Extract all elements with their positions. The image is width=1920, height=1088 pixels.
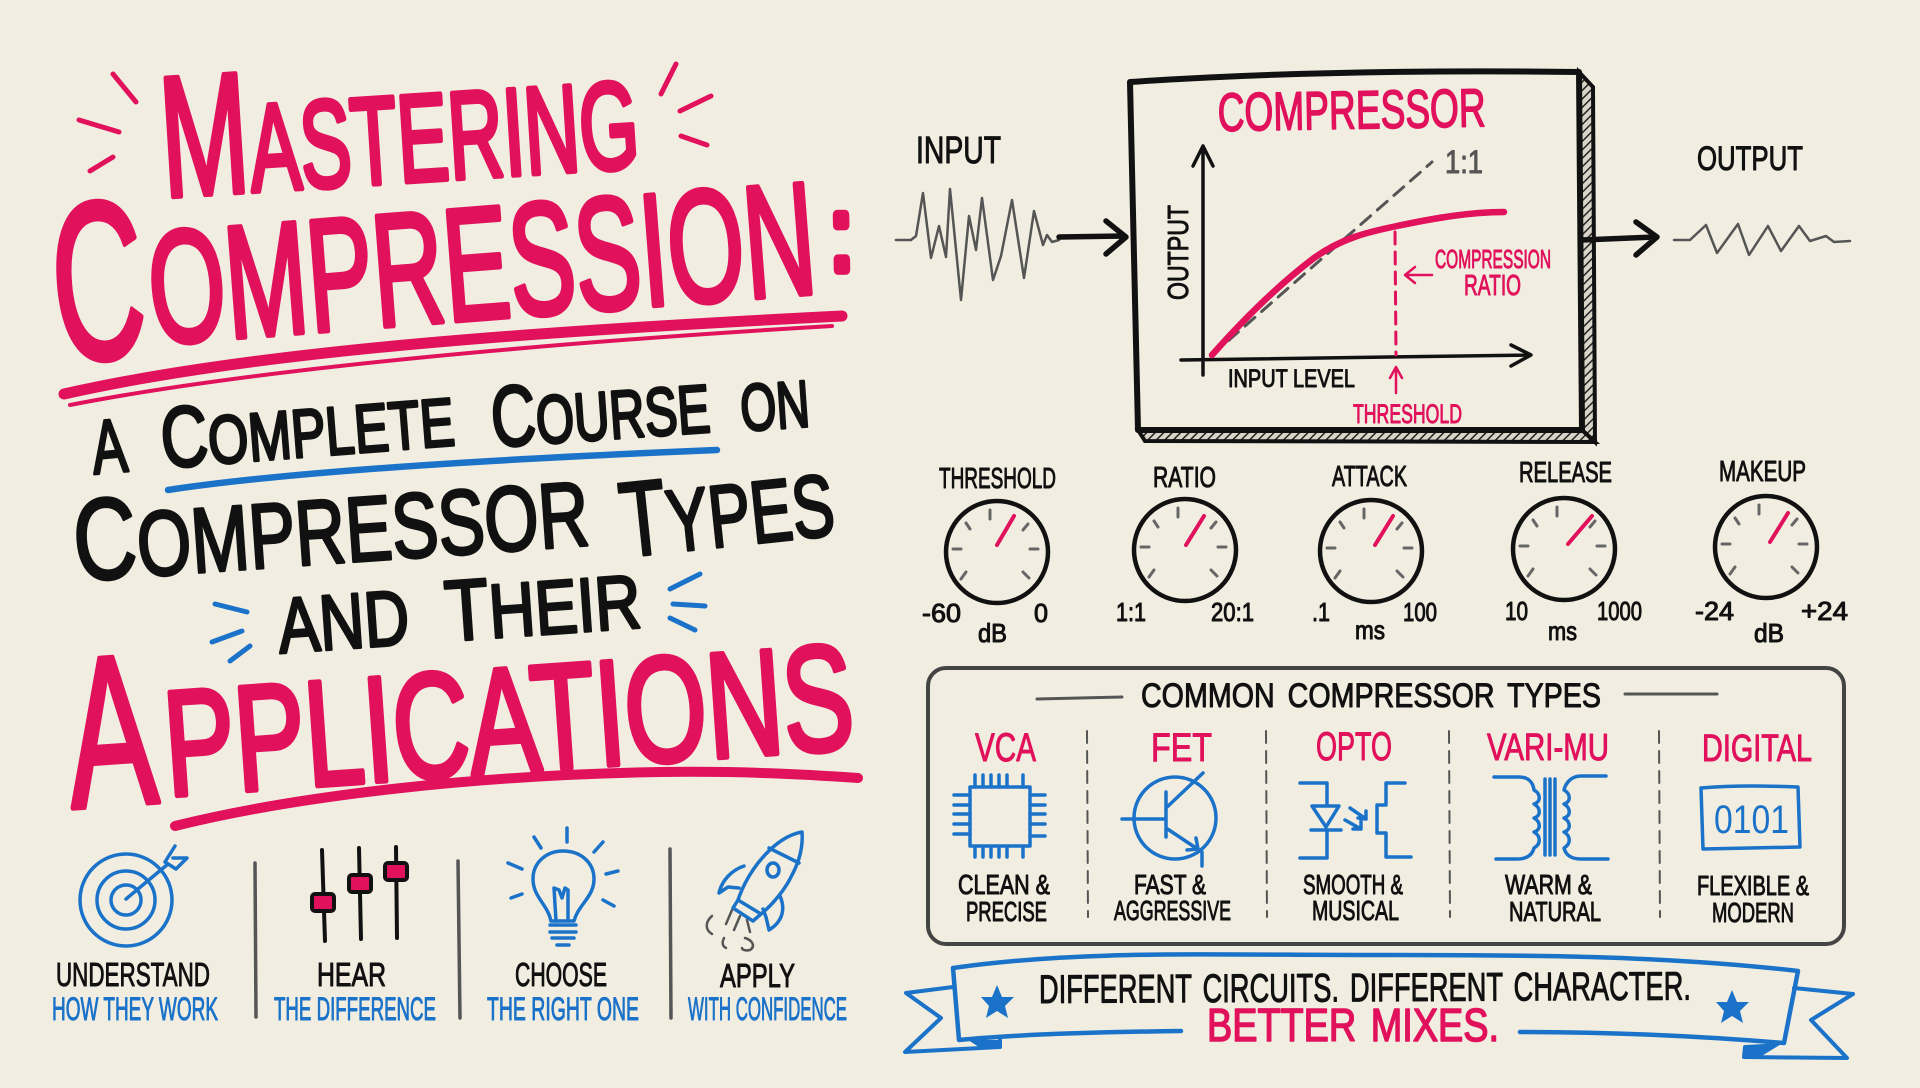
knob: makeup — [1695, 456, 1848, 648]
title first letter: A: A — [59, 609, 163, 854]
arrow to threshold — [1390, 367, 1402, 393]
box 3d side — [1579, 72, 1595, 442]
sublabel: with confidence: WITH CONFIDENCE — [688, 991, 847, 1027]
subtitle word: A: A — [88, 403, 131, 491]
benefit column: hear — [274, 847, 436, 1027]
heading rules — [1037, 694, 1717, 699]
subtitle word: Their: THEIR — [442, 551, 644, 660]
title line: Compression first letter: C — [42, 152, 153, 410]
panel frame — [928, 668, 1844, 944]
type description: MODERN — [1712, 897, 1794, 928]
dial scale — [922, 598, 1048, 648]
type description — [1114, 869, 1231, 926]
title colon: : — [828, 177, 854, 293]
dial scale: dB — [1754, 618, 1784, 648]
subtitle word: Complete: COMPLETE — [157, 368, 458, 487]
title — [42, 12, 859, 854]
knob label: THRESHOLD — [939, 463, 1056, 495]
knob: attack — [1312, 461, 1437, 645]
type description: MUSICAL — [1312, 895, 1399, 926]
knob: release — [1505, 457, 1642, 646]
type description — [1697, 870, 1809, 928]
dial scale: .1 — [1312, 597, 1330, 627]
axis label: input level: INPUT LEVEL — [1228, 365, 1355, 393]
icon: optocoupler — [1300, 783, 1411, 858]
label: threshold: THRESHOLD — [1353, 399, 1462, 429]
dial scale: 10 — [1505, 596, 1528, 626]
icon: digital display — [1701, 786, 1800, 849]
transfer chart — [1163, 144, 1551, 429]
dial scale: 1:1 — [1116, 597, 1146, 627]
benefit column: choose — [487, 828, 639, 1027]
dashed column separators — [1087, 731, 1660, 917]
type description: NATURAL — [1509, 896, 1601, 927]
knob: threshold — [922, 463, 1056, 648]
arrow to compression ratio — [1405, 267, 1432, 283]
type description: CLEAN & — [958, 869, 1050, 900]
arrow: input to compressor — [1059, 221, 1126, 254]
pink underline under Compression — [64, 316, 842, 405]
dial scale — [1116, 597, 1254, 627]
type description: FLEXIBLE & — [1697, 870, 1809, 901]
dial — [1320, 500, 1422, 602]
title line: Mastering: MASTERING — [154, 12, 643, 234]
sublabel: how they work: HOW THEY WORK — [52, 991, 218, 1027]
dial scale: ms — [1548, 616, 1577, 646]
title line: Applications: PPLICATIONS — [159, 612, 859, 828]
dial scale: 100 — [1403, 597, 1437, 627]
dashed 1:1 line — [1212, 162, 1432, 355]
knob label: RELEASE — [1519, 457, 1612, 489]
panel heading: COMMON COMPRESSOR TYPES — [1141, 677, 1601, 715]
type description: AGGRESSIVE — [1114, 895, 1231, 926]
dial scale: -24 — [1695, 596, 1734, 626]
dial — [946, 501, 1048, 603]
icon: chip — [954, 775, 1045, 857]
knob label: RATIO — [1153, 462, 1216, 494]
axis label: output: OUTPUT — [1163, 205, 1195, 300]
subtitle word: Types: TYPES — [614, 440, 839, 580]
dial — [1134, 499, 1236, 601]
label: hear: HEAR — [317, 956, 386, 993]
label: 1:1: 1:1 — [1445, 144, 1483, 180]
column separators — [255, 849, 671, 1018]
blue underline — [168, 450, 717, 490]
type description: SMOOTH & — [1303, 869, 1403, 900]
dial — [1715, 496, 1817, 598]
icon: transistor — [1122, 773, 1216, 866]
heading: compressor: COMPRESSOR — [1217, 78, 1486, 143]
subtitle word: Compressor: COMPRESSOR — [69, 440, 592, 606]
icon: transformer — [1494, 776, 1608, 859]
type description: PRECISE — [966, 896, 1047, 927]
type description — [958, 869, 1050, 927]
icon: faders — [312, 847, 407, 941]
icon: light bulb — [508, 828, 618, 945]
knob label: ATTACK — [1332, 461, 1407, 493]
type description — [1303, 869, 1403, 926]
output waveform — [1674, 224, 1850, 255]
type: VCA — [954, 726, 1050, 927]
dial scale — [1505, 596, 1642, 646]
dial — [1513, 498, 1615, 600]
dial scale: 20:1 — [1211, 597, 1254, 627]
star left — [981, 985, 1014, 1018]
type name: DIGITAL — [1702, 728, 1812, 770]
type: OPTO — [1300, 725, 1411, 926]
subtitle word: On: ON — [738, 366, 812, 445]
label: apply: APPLY — [720, 957, 795, 994]
sublabel: the difference: THE DIFFERENCE — [274, 991, 436, 1027]
subtitle word: Course: COURSE — [488, 355, 713, 466]
type: DIGITAL — [1697, 728, 1812, 928]
compression curve — [1212, 212, 1504, 355]
type name: OPTO — [1316, 725, 1392, 769]
dial scale: dB — [978, 618, 1007, 648]
type name: FET — [1151, 726, 1212, 770]
label: compression ratio: RATIO — [1464, 270, 1521, 302]
label: compression ratio: COMPRESSION — [1435, 244, 1551, 274]
input label: INPUT — [916, 130, 1001, 172]
dial scale: 0 — [1034, 598, 1048, 628]
type: FET — [1114, 726, 1231, 926]
benefit column: apply — [688, 832, 847, 1027]
dial scale: ms — [1355, 615, 1385, 645]
type name: VCA — [975, 726, 1036, 770]
knob: ratio — [1116, 462, 1254, 627]
axes — [1181, 146, 1531, 375]
banner text: better mixes: BETTER MIXES. — [1207, 999, 1499, 1051]
subtitle word: And: AND — [275, 573, 412, 670]
type name: VARI-MU — [1487, 727, 1609, 769]
sublabel: the right one: THE RIGHT ONE — [487, 991, 639, 1027]
banner — [905, 954, 1853, 1058]
type: VARI-MU — [1487, 727, 1609, 927]
star right — [1716, 990, 1749, 1023]
icon: rocket — [707, 832, 802, 950]
benefit column: understand — [52, 846, 218, 1027]
label: understand: UNDERSTAND — [56, 956, 210, 993]
dial scale: 1000 — [1597, 596, 1642, 626]
dial scale — [1695, 596, 1848, 648]
title line: Compression: OMPRESSION — [142, 148, 822, 378]
dial scale: -60 — [922, 598, 961, 628]
panel: common compressor types — [928, 668, 1844, 944]
dial scale — [1312, 597, 1437, 645]
blue accent ticks around And Their — [212, 574, 705, 661]
ribbon tails — [905, 987, 1853, 1058]
icon: target with arrow — [80, 846, 187, 946]
box face — [1130, 71, 1582, 430]
ribbon outline — [953, 954, 1798, 1043]
pink accent ticks around title — [79, 64, 711, 171]
label: choose: CHOOSE — [515, 956, 607, 993]
threshold dashed marker — [1395, 232, 1396, 355]
output label: OUTPUT — [1697, 140, 1803, 178]
pink underline under Applications — [175, 772, 858, 826]
type description: FAST & — [1134, 869, 1206, 900]
compressor box — [1130, 71, 1595, 442]
type description — [1505, 869, 1601, 927]
type description: WARM & — [1505, 869, 1592, 900]
input waveform — [896, 189, 1059, 300]
icon: digital display: 0101 — [1714, 798, 1789, 842]
knob label: MAKEUP — [1719, 456, 1806, 488]
dial scale: +24 — [1801, 596, 1848, 626]
arrow: compressor to output — [1582, 222, 1657, 255]
label: compression ratio — [1435, 244, 1551, 302]
box 3d bottom — [1138, 430, 1595, 442]
